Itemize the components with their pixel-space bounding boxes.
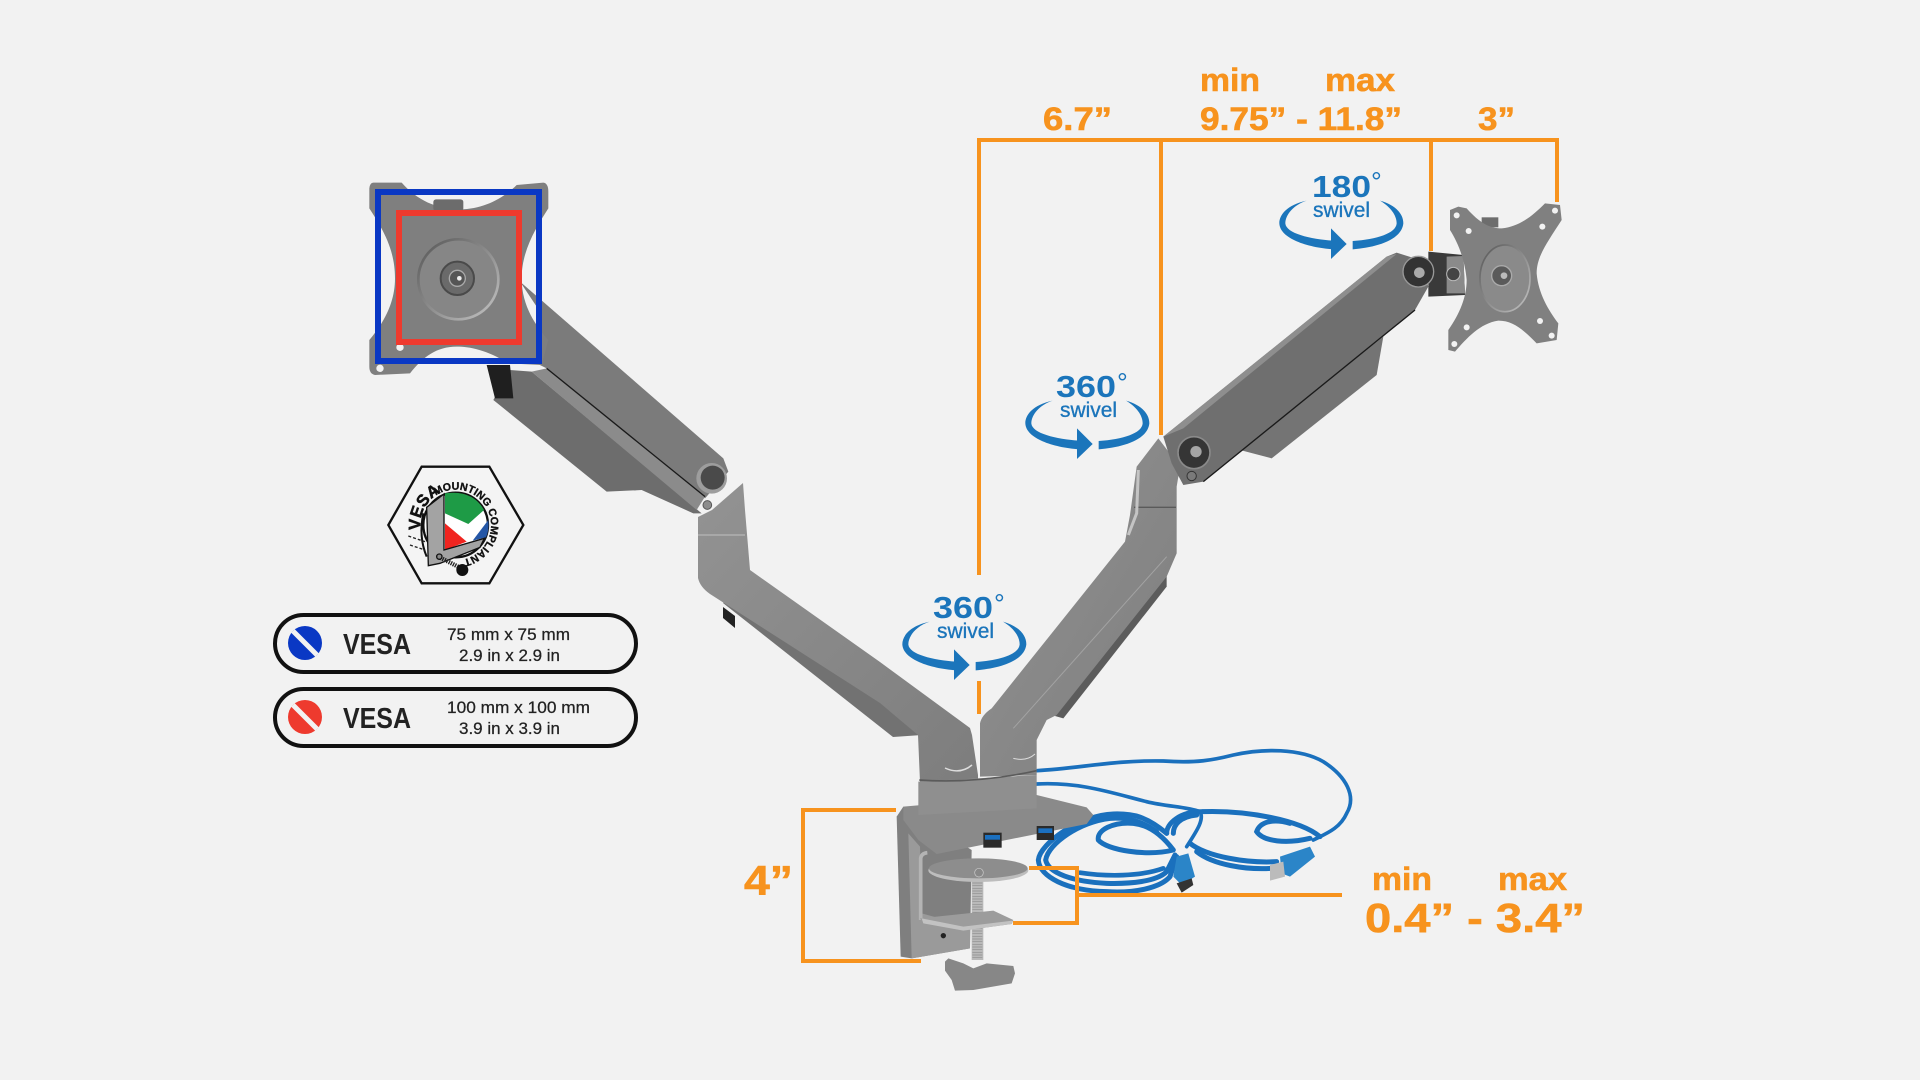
- legend pill: VESA 100: [275, 689, 636, 746]
- label: lower min: min: [1372, 861, 1432, 897]
- lower jaw: [920, 911, 1013, 931]
- VESA label: VESA: [343, 629, 411, 661]
- arm top strip: [1163, 254, 1397, 437]
- cables: [1037, 751, 1351, 893]
- swivel 360 lower: 360: [933, 590, 993, 625]
- swivel 360 upper: swivel: [1060, 399, 1117, 422]
- arm main face: [1163, 253, 1428, 485]
- blue VESA 75 frame: [378, 192, 539, 361]
- left lower arm: [698, 483, 978, 782]
- dimension bracket: desk edge 4 inch: [803, 810, 921, 961]
- swivel arrow: [1025, 401, 1149, 459]
- dimension lines: top: [979, 140, 1557, 714]
- left upper arm: [487, 282, 728, 513]
- swivel arrow: [902, 622, 1026, 680]
- swivel 360 upper: [1025, 368, 1149, 459]
- label: clamp range: 0.4” - 3.4”: [1365, 895, 1585, 941]
- black slot: [487, 365, 513, 398]
- swivel 360 upper: 360: [1056, 369, 1116, 404]
- bracket: [921, 853, 927, 920]
- label: 4 inch: 4”: [744, 857, 793, 904]
- swivel arrow: [1279, 201, 1403, 259]
- column block: [918, 775, 1037, 815]
- red VESA 100 frame: [399, 213, 519, 342]
- swivel 360 lower: swivel: [937, 620, 994, 643]
- arm top face: [520, 282, 728, 498]
- size text inches: 2.9 in x 2.9 in: [459, 646, 560, 665]
- label: max: max: [1325, 62, 1395, 98]
- icon: red disc: [288, 700, 322, 734]
- VESA label: VESA: [343, 703, 411, 735]
- label: lower max: max: [1498, 861, 1567, 897]
- VESA badge: [387, 466, 525, 584]
- label: min: min: [1200, 62, 1260, 98]
- right VESA plate: [1448, 203, 1562, 352]
- USB ports: [983, 826, 1054, 848]
- tilt joint: [1428, 252, 1465, 297]
- swivel 180: °: [1371, 167, 1382, 197]
- swivel 180: [1279, 167, 1403, 259]
- label: 6.7 inch: 6.7”: [1043, 101, 1112, 137]
- USB plug type A: [1270, 847, 1315, 881]
- label: 3 inch: 3”: [1478, 101, 1515, 137]
- arm under piece: [1240, 337, 1383, 458]
- back plate: [897, 807, 972, 958]
- label: arm range: 9.75” - 11.8”: [1200, 101, 1402, 137]
- size text: 100 mm x 100 mm: [447, 698, 590, 717]
- arm lower face: [493, 370, 702, 513]
- upper jaw: [928, 858, 1028, 882]
- dimension bracket: clamp range: [1013, 868, 1342, 923]
- arm middle strip: [532, 368, 705, 510]
- size text inches: 3.9 in x 3.9 in: [459, 719, 560, 738]
- base and clamp: [897, 771, 1093, 991]
- swivel 360 lower: [902, 589, 1026, 680]
- left VESA plate: [369, 183, 548, 375]
- icon: blue disc: [288, 626, 322, 660]
- swivel 360 lower: °: [994, 589, 1005, 619]
- swivel 180: swivel: [1313, 199, 1370, 222]
- top plate: [903, 795, 1093, 854]
- base knob: [1178, 437, 1210, 469]
- swivel 360 upper: °: [1117, 368, 1128, 398]
- right lower arm: [980, 438, 1180, 777]
- knob: [945, 958, 1015, 991]
- USB plug micro: [1173, 853, 1195, 893]
- screw: [972, 880, 983, 960]
- badge text: mounting compliant: MOUNTING COMPLIANT: [434, 482, 499, 566]
- swivel 180: 180: [1312, 169, 1371, 204]
- badge text: VESA: VESA: [408, 485, 441, 530]
- size text: 75 mm x 75 mm: [447, 625, 570, 644]
- legend pill: VESA 75: [275, 615, 636, 672]
- elbow knob: [696, 463, 727, 494]
- right upper arm: [1163, 203, 1562, 485]
